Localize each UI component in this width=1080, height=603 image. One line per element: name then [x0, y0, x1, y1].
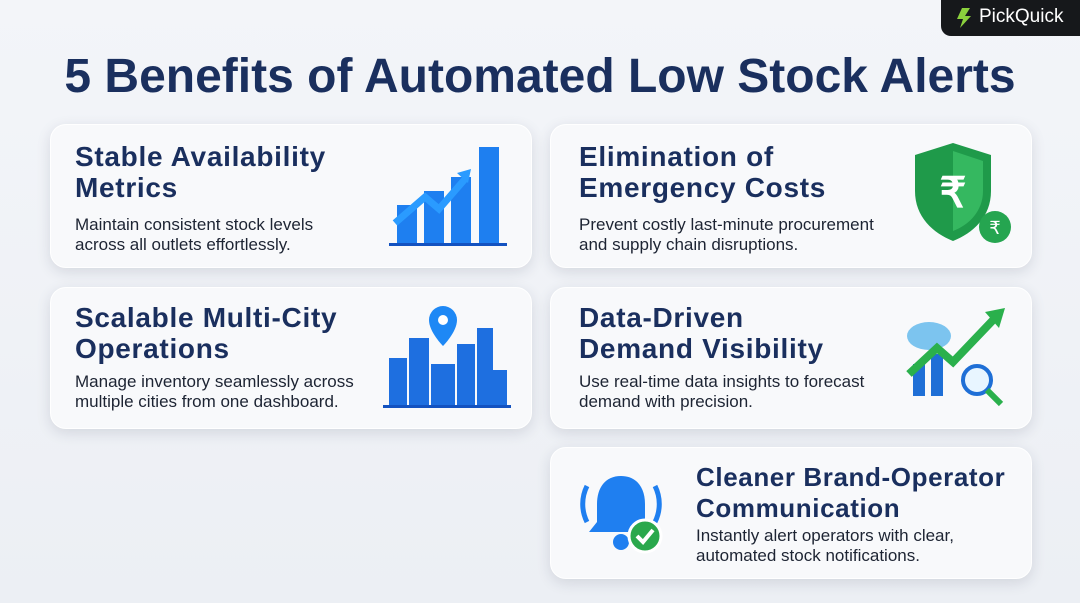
- heading: Scalable Multi-City: [75, 302, 337, 333]
- heading: [579, 141, 826, 203]
- panel: stable availability: [50, 124, 532, 268]
- text: [75, 215, 313, 254]
- panel: multi-city: [50, 287, 532, 429]
- title: 5 Benefits of Automated Low Stock Alerts: [64, 50, 1016, 103]
- text: [579, 215, 874, 254]
- logo badge: PickQuick: [979, 6, 1063, 27]
- heading: Elimination of: [579, 141, 774, 172]
- text: Use real-time data insights to forecast: [579, 372, 864, 391]
- text: Prevent costly last-minute procurement: [579, 215, 874, 234]
- panel: data-driven: [550, 287, 1032, 429]
- logo badge: [941, 0, 1080, 36]
- text: [579, 372, 864, 411]
- text: demand with precision.: [579, 392, 753, 411]
- heading: [75, 302, 337, 364]
- icon: bolt: [957, 8, 971, 28]
- icon: bell: [580, 476, 662, 550]
- heading: Stable Availability: [75, 141, 326, 172]
- icon: cloud chart: [906, 308, 1005, 406]
- heading: [579, 302, 824, 364]
- icon: city: [383, 306, 511, 408]
- heading: Metrics: [75, 172, 178, 203]
- panel: emergency costs: [550, 124, 1032, 268]
- heading: Demand Visibility: [579, 333, 824, 364]
- text: multiple cities from one dashboard.: [75, 392, 339, 411]
- text: Manage inventory seamlessly across: [75, 372, 354, 391]
- text: Maintain consistent stock levels: [75, 215, 313, 234]
- text: [696, 526, 954, 565]
- icon: rupee shield: [915, 143, 1011, 243]
- text: automated stock notifications.: [696, 546, 920, 565]
- text: Instantly alert operators with clear,: [696, 526, 954, 545]
- heading: Communication: [696, 493, 900, 523]
- heading: [75, 141, 326, 203]
- icon: bar chart: [389, 147, 507, 246]
- icon: rupee shield: ₹: [989, 218, 1001, 238]
- heading: [696, 462, 1005, 523]
- icon: rupee shield: ₹: [940, 169, 966, 216]
- text: [75, 372, 354, 411]
- text: and supply chain disruptions.: [579, 235, 798, 254]
- heading: Operations: [75, 333, 230, 364]
- heading: Data-Driven: [579, 302, 744, 333]
- heading: Emergency Costs: [579, 172, 826, 203]
- text: across all outlets effortlessly.: [75, 235, 291, 254]
- panel: communication: [550, 447, 1032, 579]
- heading: Cleaner Brand-Operator: [696, 462, 1005, 492]
